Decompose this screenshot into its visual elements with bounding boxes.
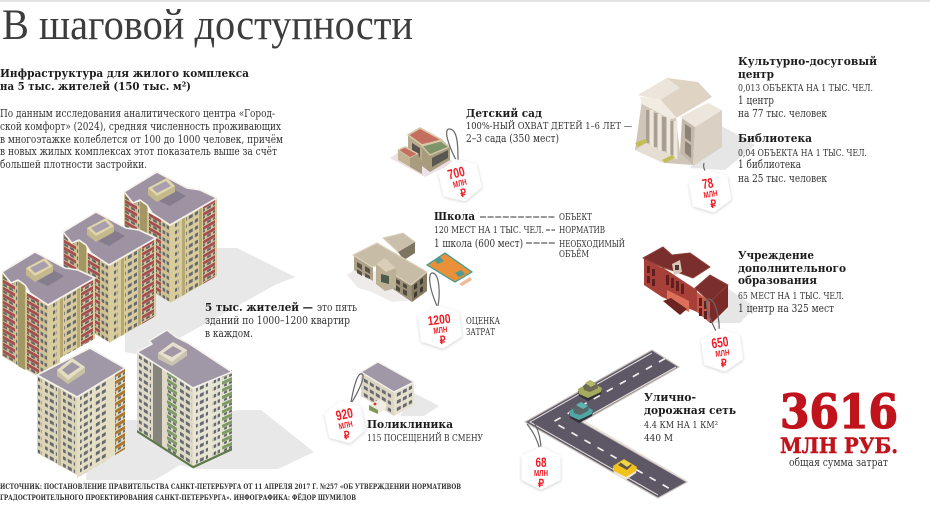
panel: additional education (643, 247, 846, 372)
price tag: 78 (689, 163, 731, 214)
additional education text: Учреждение (738, 249, 814, 262)
library text: 1 библиотека (738, 158, 801, 171)
price tag: 68: ₽ (538, 478, 544, 490)
price tag: 700 (438, 129, 482, 204)
source note: ИСТОЧНИК: ПОСТАНОВЛЕНИЕ ПРАВИТЕЛЬСТВА САНКТ-ПЕТЕРБУРГА ОТ 11 АПРЕЛЯ 2017 Г. №257 «ОБ УТВЕРЖДЕНИИ НОРМАТИВОВ (0, 482, 461, 491)
illustration: residential towers (2, 172, 314, 480)
price tag: 1200: ₽ (439, 334, 446, 347)
car: green (578, 380, 602, 401)
price tag: 650: МЛН (715, 347, 730, 359)
polyclinic text: Поликлиника (367, 418, 453, 431)
price tag: 1200: МЛН (433, 324, 448, 336)
panel: kindergarten (390, 107, 632, 204)
price tag: 700: 700 (446, 163, 466, 183)
price tag: 78: ₽ (709, 198, 717, 211)
car: teal (569, 402, 593, 423)
icon: red building (643, 247, 755, 323)
intro text: в многоэтажке колеблется от 100 до 1000 человек, причём (0, 133, 283, 146)
title: В шаговой доступности (2, 2, 413, 49)
building: tower 3 (2, 252, 95, 383)
price tag: 650 (701, 299, 743, 372)
panel: cultural centre and library (635, 55, 877, 214)
kindergarten text: Детский сад (466, 107, 542, 120)
price tag: 920: 920 (334, 404, 354, 424)
panel: school (347, 210, 625, 349)
intro text (0, 107, 283, 171)
intro text: ской комфорт» (2024), средняя численность проживающих (0, 120, 282, 133)
school legend text: ОБЪЕКТ (559, 213, 592, 223)
cultural centre text: 0,013 ОБЪЕКТА НА 1 ТЫС. ЧЕЛ. (738, 83, 873, 94)
total sum (780, 385, 898, 469)
price tag: 78: 78 (701, 174, 715, 192)
intro text: По данным исследования аналитического центра «Город- (0, 107, 275, 120)
total sum: 3616 (780, 385, 898, 440)
additional education text: 1 центр на 325 мест (738, 302, 834, 315)
top edge (0, 0, 930, 2)
caption: five buildings: 5 тыс. жителей — (205, 301, 313, 314)
building: tower 4 (37, 348, 125, 478)
school legend text: НЕОБХОДИМЫЙ (559, 238, 625, 250)
price tag: 1200: 1200 (427, 311, 451, 328)
kindergarten text: 2–3 сада (350 мест) (466, 132, 559, 145)
school legend text: 120 МЕСТ НА 1 ТЫС. ЧЕЛ. (434, 225, 544, 236)
school legend text (434, 210, 625, 338)
source note (0, 482, 461, 502)
price tag: 920: МЛН (338, 419, 354, 431)
school legend text: ОБЪЁМ (559, 248, 589, 260)
price tag: 700: МЛН (452, 177, 468, 190)
price tag: 68 (523, 424, 559, 490)
caption: five buildings: в каждом. (205, 327, 253, 340)
intro heading: на 5 тыс. жителей (150 тыс. м²) (0, 80, 191, 93)
price tag: 650: ₽ (720, 358, 728, 370)
library text: 0,04 ОБЪЕКТА НА 1 ТЫС. ЧЕЛ. (738, 148, 867, 159)
price tag: 68: МЛН (534, 468, 548, 478)
icon: road with cars (525, 350, 687, 498)
caption: five buildings: это пять (317, 301, 357, 314)
library text (738, 132, 867, 185)
caption: five buildings: зданий по 1000–1200 квартир (205, 314, 350, 327)
price tag: 1200 (419, 273, 461, 349)
polyclinic text: 115 ПОСЕЩЕНИЙ В СМЕНУ (367, 432, 483, 444)
school legend text: Школа (434, 210, 475, 223)
icon: kindergarten building (390, 128, 455, 177)
price tag: 920: ₽ (343, 429, 351, 442)
kindergarten text: 100%-НЫЙ ОХВАТ ДЕТЕЙ 1–6 ЛЕТ — (466, 120, 632, 132)
library text: на 25 тыс. человек (738, 172, 827, 185)
caption: five buildings (205, 301, 357, 340)
building: tower 1 (124, 172, 217, 303)
school legend text: 1 школа (600 мест) (434, 237, 523, 250)
cultural centre text: на 77 тыс. человек (738, 107, 827, 120)
cultural centre text: центр (738, 68, 774, 81)
source note: ГРАДОСТРОИТЕЛЬНОГО ПРОЕКТИРОВАНИЯ САНКТ-ПЕТЕРБУРГА». ИНФОГРАФИКА: ФЁДОР ШУМИЛОВ (0, 493, 356, 502)
intro text: в новых жилых комплексах этот показатель выше за счёт (0, 145, 277, 158)
building: tower 5 (137, 330, 232, 468)
total sum: МЛН РУБ. (780, 433, 898, 458)
building: tower 2 (63, 212, 156, 343)
additional education text: дополнительного (738, 262, 846, 275)
additional education text: образования (738, 274, 817, 287)
road text (644, 391, 737, 444)
icon: school building (347, 233, 472, 302)
panel: polyclinic (324, 362, 483, 445)
kindergarten text (466, 107, 632, 145)
icon: polyclinic building (361, 362, 439, 416)
panel: road network (523, 350, 737, 498)
price tag: 68: 68 (536, 454, 547, 470)
additional education text: 65 МЕСТ НА 1 ТЫС. ЧЕЛ. (738, 291, 844, 302)
road text: дорожная сеть (644, 404, 737, 417)
price tag: 920 (324, 374, 366, 445)
intro heading (0, 67, 249, 93)
cultural centre text: Культурно-досуговый (738, 55, 877, 68)
icon: cultural centre building (635, 78, 755, 170)
intro heading: Инфраструктура для жилого комплекса (0, 67, 249, 80)
total sum: общая сумма затрат (789, 456, 888, 469)
price tag: 700: ₽ (459, 187, 468, 200)
road text: 440 М (644, 433, 673, 444)
price tag: 78: МЛН (703, 188, 718, 200)
cultural centre text (738, 55, 877, 120)
cultural centre text: 1 центр (738, 94, 774, 107)
additional education text (738, 249, 846, 315)
school legend text: НОРМАТИВ (559, 226, 605, 236)
intro text: большей плотности застройки. (0, 158, 147, 171)
price tag: 650: 650 (710, 333, 730, 351)
road text: Улично- (644, 391, 696, 404)
car: yellow (613, 459, 637, 480)
school legend text: ЗАТРАТ (466, 328, 495, 338)
school legend text: ОЦЕНКА (466, 317, 500, 327)
polyclinic text (367, 418, 483, 444)
library text: Библиотека (738, 132, 812, 145)
road text: 4.4 КМ НА 1 КМ² (644, 420, 718, 431)
